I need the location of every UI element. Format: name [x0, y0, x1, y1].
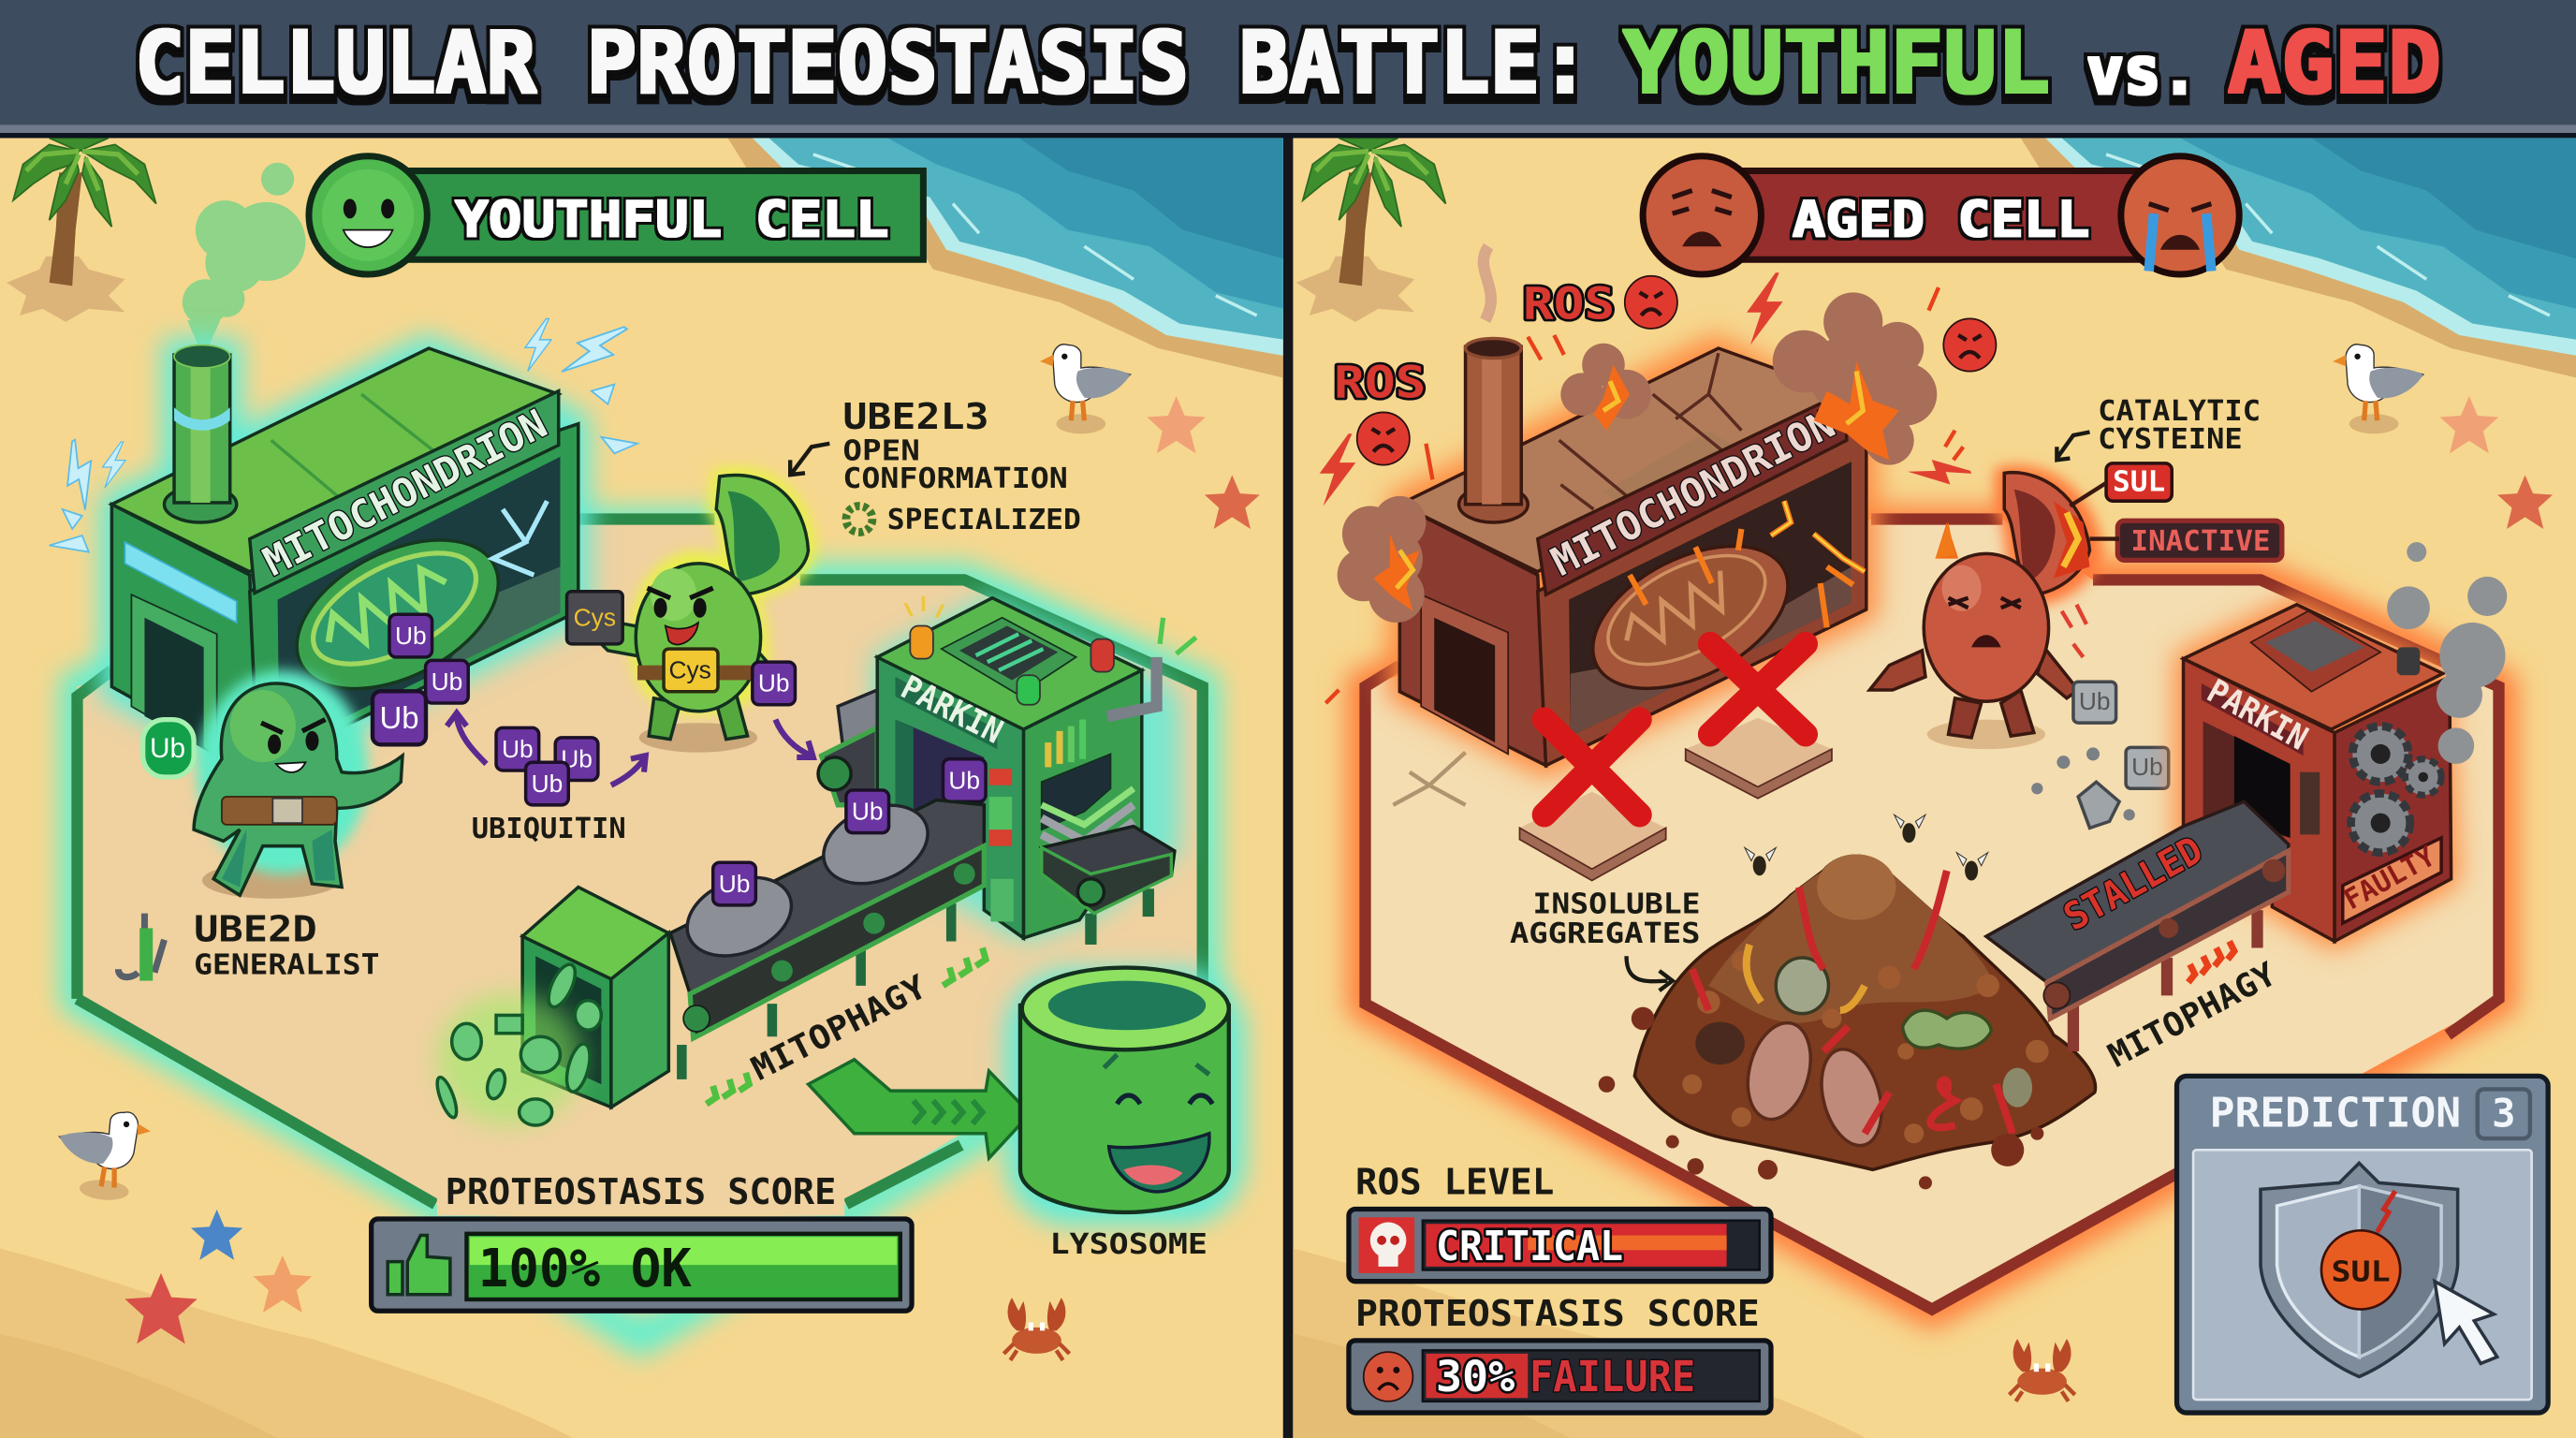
label: ubiquitin: UBIQUITIN	[472, 813, 626, 845]
panel: proteostasis score aged: 30%	[1436, 1352, 1515, 1401]
lysosome	[1020, 968, 1229, 1212]
palm tree	[7, 138, 156, 322]
palm tree	[1296, 138, 1445, 322]
label: insoluble aggregates: AGGREGATES	[1510, 917, 1701, 950]
icon: cursor	[2435, 1282, 2497, 1363]
youthful cell banner: YOUTHFUL CELL	[455, 192, 889, 249]
center divider	[1283, 138, 1293, 1438]
gray smoke	[2387, 542, 2507, 764]
character: UBE2D	[143, 670, 402, 899]
beach background with water	[0, 138, 1298, 1438]
Ub tag on hand	[753, 662, 795, 705]
label: catalytic cysteine: CATALYTIC	[2098, 395, 2261, 428]
SUL tag	[2106, 463, 2172, 501]
big green arrow	[809, 1060, 1030, 1158]
ubiquitin cubes	[373, 614, 598, 805]
label: mitophagy	[707, 947, 986, 1104]
smoke	[183, 163, 305, 359]
conveyor stalled	[1986, 801, 2289, 1051]
score bar: 100% OK: 100% OK	[478, 1239, 692, 1299]
inactive gray ubiquitin: Ub	[2131, 753, 2163, 781]
title: AGED	[2228, 12, 2441, 112]
character: UBE2L3: Cys	[668, 656, 711, 684]
faulty label	[2343, 838, 2441, 923]
panel: prediction	[2177, 1076, 2548, 1413]
crab	[1003, 1298, 1070, 1360]
machine right face	[1023, 670, 1142, 938]
Cys tag yellow	[664, 649, 718, 692]
prediction number	[2478, 1089, 2530, 1138]
disposal hopper	[522, 888, 668, 1108]
score bar: 100% OK	[372, 1219, 912, 1311]
cell boundary wall	[77, 519, 1203, 1204]
label: mitophagy aged: MITOPHAGY	[2102, 955, 2282, 1076]
PARKIN machine faulty: PARKIN	[2201, 672, 2314, 758]
mitochondrion factory damaged	[1399, 348, 1866, 766]
ubiquitin cubes: Ub	[561, 744, 593, 772]
mitochondrion factory glow	[111, 346, 578, 769]
panel: youthful cell	[0, 138, 1298, 1438]
ubiquitin cubes: Ub	[395, 622, 427, 650]
ROS labels and faces: ROS	[1334, 358, 1426, 409]
label: insoluble aggregates	[1510, 888, 1701, 990]
icon: shield: SUL	[2331, 1256, 2391, 1289]
cell boundary glow	[77, 519, 1203, 1339]
label: UBE2L3: OPEN	[842, 434, 920, 467]
title	[135, 12, 2441, 112]
seagull	[2333, 345, 2423, 433]
header bar	[0, 0, 2576, 139]
character: UBE2L3 damaged	[1869, 463, 2282, 749]
lysosome glow	[1005, 969, 1245, 1225]
starfish	[124, 396, 1260, 1343]
red X markers	[1519, 644, 1832, 881]
label: proteostasis score: PROTEOSTASIS SCORE	[446, 1171, 836, 1213]
aged cell banner: AGED CELL	[1793, 192, 2089, 249]
conveyor belt: Ub	[719, 870, 750, 898]
starfish	[2440, 396, 2553, 529]
aged cell banner	[1643, 156, 2239, 274]
damaged mitochondria on belt	[676, 863, 803, 971]
gears	[2352, 726, 2408, 782]
label: mitophagy: MITOPHAGY	[745, 968, 932, 1089]
purple flow arrows	[446, 713, 813, 785]
panel: aged cell	[1293, 138, 2576, 1438]
INACTIVE tag	[2117, 521, 2282, 560]
green fragments	[433, 961, 601, 1125]
seagull upper	[1040, 345, 1131, 433]
label: insoluble aggregates: INSOLUBLE	[1533, 888, 1701, 921]
title: YOUTHFUL	[1623, 12, 2050, 112]
PARKIN machine: PARKIN	[895, 668, 1009, 752]
label: catalytic cysteine	[2056, 395, 2261, 460]
conveyor belt	[670, 790, 984, 1079]
face: happy	[309, 156, 427, 274]
character: UBE2D: Ub	[150, 733, 185, 764]
panel: proteostasis score aged: FAILURE	[1530, 1352, 1695, 1401]
organelle	[1570, 517, 1811, 718]
ubiquitin cubes: Ub	[432, 668, 462, 696]
smoke clouds with fire	[1338, 292, 1958, 627]
machine left face	[877, 657, 1023, 938]
face: worried	[1643, 156, 1761, 274]
label: lysosome: LYSOSOME	[1050, 1228, 1208, 1261]
ubiquitin cubes: Ub	[532, 770, 563, 798]
bomb: SUL	[2321, 1230, 2400, 1310]
ubiquitin cubes: Ub	[502, 735, 534, 763]
icon: skull	[1358, 1217, 1414, 1273]
panel: ROS level: ROS LEVEL	[1355, 1162, 1554, 1204]
icon: sad face	[1364, 1352, 1412, 1401]
PARKIN machine: Ub	[948, 766, 980, 794]
panel: ROS level	[1349, 1162, 1771, 1282]
organelle	[296, 538, 500, 691]
label: UBE2L3	[790, 396, 1081, 536]
sign: mitochondrion: MITOCHONDRION	[1544, 401, 1842, 585]
youthful cell banner	[309, 156, 923, 274]
label: UBE2L3: UBE2L3	[842, 396, 989, 438]
inactive gray ubiquitin	[2031, 682, 2169, 828]
PARKIN machine	[877, 596, 1196, 945]
panel: proteostasis score aged: PROTEOSTASIS SCORE	[1355, 1293, 1760, 1335]
mitochondrion factory	[111, 348, 578, 769]
energy sparks	[50, 311, 637, 552]
label: UBE2L3: SPECIALIZED	[887, 504, 1081, 536]
Cys tag dark	[567, 592, 622, 644]
label: UBE2D generalist: GENERALIST	[194, 949, 379, 982]
chimney	[165, 345, 237, 522]
title: vs.	[2086, 33, 2198, 110]
character: UBE2L3: Cys	[574, 604, 616, 632]
ROS labels and faces	[1320, 246, 1996, 703]
character: UBE2L3 damaged: INACTIVE	[2130, 525, 2271, 558]
label: catalytic cysteine: CYSTEINE	[2098, 423, 2243, 456]
PARKIN machine faulty: FAULTY	[2338, 840, 2441, 917]
panel: ROS level: CRITICAL	[1436, 1223, 1623, 1270]
label: UBE2L3: CONFORMATION	[842, 462, 1068, 495]
stalled text: STALLED	[2056, 828, 2210, 940]
character: UBE2L3 damaged: SUL	[2113, 466, 2165, 499]
face: crying	[2121, 156, 2239, 274]
crab	[2009, 1339, 2075, 1401]
flies	[1745, 814, 1988, 881]
chimney rusted	[1459, 338, 1528, 522]
icon: thumbs up	[388, 1236, 450, 1295]
seagull lower	[54, 1107, 152, 1203]
beach background with water	[1293, 138, 2576, 1438]
factory glow	[1399, 346, 1866, 766]
prediction number: 3	[2492, 1091, 2515, 1137]
inactive gray ubiquitin: Ub	[2079, 687, 2111, 715]
PARKIN machine faulty glow	[2184, 605, 2452, 941]
PARKIN machine glow	[877, 598, 1177, 938]
title: CELLULAR PROTEOSTASIS BATTLE:	[135, 12, 1590, 112]
ubiquitin cubes: Ub	[379, 700, 419, 735]
green Ub tag	[143, 720, 194, 777]
conveyor belt: Ub	[852, 798, 884, 826]
sign: mitochondrion: MITOCHONDRION	[256, 401, 554, 585]
panel: prediction: PREDICTION	[2210, 1090, 2461, 1137]
pile of aggregates	[1599, 854, 2096, 1189]
label: UBE2D generalist	[118, 908, 379, 982]
cell boundary wall	[1365, 519, 2499, 1310]
ROS labels and faces: ROS	[1523, 278, 1615, 330]
icon: shield	[2261, 1163, 2458, 1376]
cracks in floor	[1393, 753, 1466, 805]
panel: proteostasis score aged	[1349, 1293, 1771, 1413]
character: UBE2L3: Ub	[758, 669, 789, 697]
label: UBE2D generalist: UBE2D	[194, 908, 317, 950]
back conveyor behind machine	[818, 690, 877, 805]
cell boundary glow	[1365, 519, 2499, 1310]
character: UBE2L3	[567, 476, 809, 753]
PARKIN machine faulty	[2184, 605, 2452, 941]
